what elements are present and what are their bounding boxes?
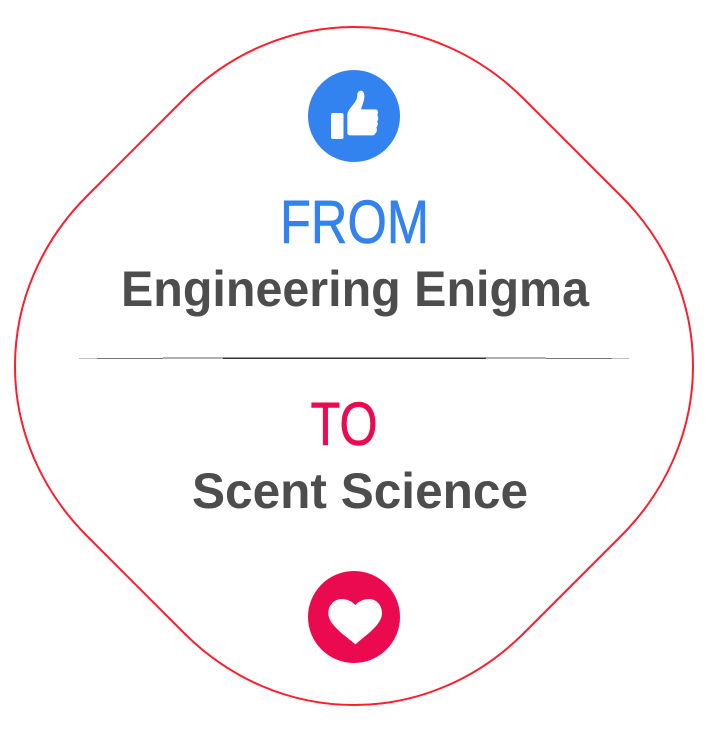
text: Engineering Enigma: Engineering Enigma bbox=[121, 261, 590, 317]
heading: FROM: FROM bbox=[280, 188, 429, 256]
divider bbox=[79, 357, 629, 359]
heading: TO: TO bbox=[310, 390, 378, 458]
text: Scent Science: Scent Science bbox=[192, 463, 528, 519]
icon: heart bbox=[308, 571, 400, 663]
icon: thumbs up bbox=[308, 70, 400, 162]
